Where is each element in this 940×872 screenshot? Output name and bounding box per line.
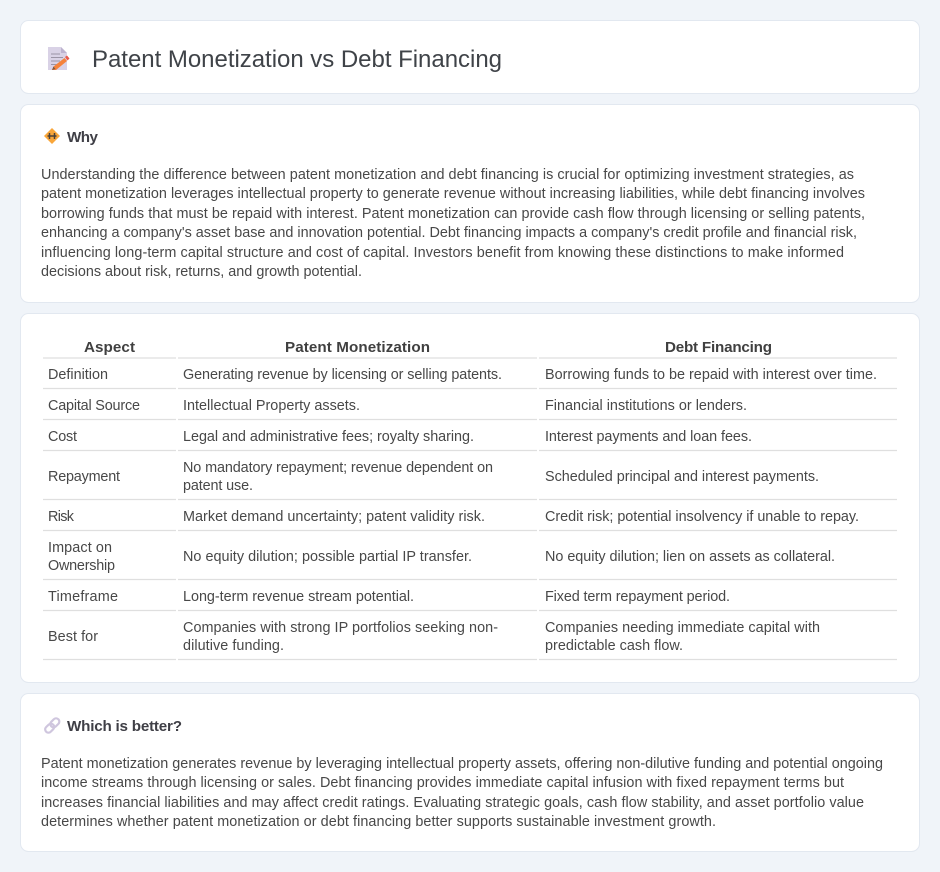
row: timeframe: Fixed term repayment period. (545, 589, 730, 605)
row: impact on ownership: No equity dilution; possible partial IP transfer. (183, 549, 472, 565)
row: cost: Interest payments and loan fees. (545, 429, 752, 445)
text block: why paragraph: influencing long-term capital structure and cost of capital. Investors benefit from knowing these distinctions to make informed (41, 245, 844, 261)
text block: why paragraph: patent monetization leverages intellectual property to generate revenue without increasing liabilities, while debt financing involves (41, 186, 865, 202)
row: risk: Market demand uncertainty; patent validity risk. (183, 509, 485, 525)
icon: memo with pencil (48, 47, 70, 70)
row: cost: Legal and administrative fees; royalty sharing. (183, 429, 474, 445)
icon: chain link (44, 717, 61, 734)
row: risk: Risk (48, 509, 75, 525)
row: best for (48, 620, 820, 654)
row: capital source: Financial institutions or lenders. (545, 398, 747, 414)
panel: why (20, 104, 920, 302)
row: impact on ownership: Impact on (48, 540, 112, 556)
text block: which is better paragraph: determines whether patent monetization or debt financing better supports sustainable investment growth. (41, 814, 716, 830)
icon: warning diamond (44, 128, 60, 144)
row: definition: Generating revenue by licensing or selling patents. (183, 367, 502, 383)
row: timeframe: Timeframe (48, 589, 118, 605)
panel: which is better (20, 694, 920, 852)
row: timeframe (48, 589, 730, 605)
text block: which is better paragraph: Patent monetization generates revenue by leveraging intellectual property assets, offering non-dilutive funding and potential ongoing (41, 756, 883, 772)
row: repayment (48, 460, 819, 494)
panel: header (20, 20, 920, 94)
heading: why: Why (67, 129, 99, 146)
row: capital source: Capital Source (48, 398, 140, 414)
row: risk: Credit risk; potential insolvency if unable to repay. (545, 509, 859, 525)
text block: why paragraph: enhancing a company's asset base and innovation potential. Debt financing impacts a company's credit profile and financial risk, (41, 225, 857, 241)
text block: why paragraph: borrowing funds that must be repaid with interest. Patent monetization can provide cash flow through licensing or selling patents, (41, 206, 865, 222)
row: capital source: Intellectual Property assets. (183, 398, 360, 414)
row: repayment: No mandatory repayment; revenue dependent on (183, 460, 493, 476)
table header row: Debt Financing (665, 339, 772, 356)
row: best for: predictable cash flow. (545, 638, 683, 654)
row: impact on ownership: No equity dilution; lien on assets as collateral. (545, 549, 835, 565)
text block: which is better paragraph: income streams through licensing or sales. Debt financing provides immediate capital infusion with fixed repayment terms but (41, 775, 844, 791)
text block: why paragraph: Understanding the difference between patent monetization and debt financing is crucial for optimizing investment strategies, as (41, 167, 854, 183)
table header row (84, 339, 772, 356)
text block: which is better paragraph (41, 756, 883, 830)
row: impact on ownership: Ownership (48, 558, 115, 574)
row: best for: Companies needing immediate capital with (545, 620, 820, 636)
heading: which is better: Which is better? (67, 718, 182, 735)
row: capital source (48, 398, 747, 414)
row: best for: Best for (48, 629, 98, 645)
row: repayment: patent use. (183, 478, 253, 494)
title: Patent Monetization vs Debt Financing (92, 46, 502, 73)
row: best for: dilutive funding. (183, 638, 284, 654)
table header row: Aspect (84, 339, 135, 356)
row: repayment: Repayment (48, 469, 120, 485)
row: repayment: Scheduled principal and interest payments. (545, 469, 819, 485)
row: impact on ownership (48, 540, 835, 574)
text block: why paragraph: decisions about risk, returns, and growth potential. (41, 264, 362, 280)
table header row: Patent Monetization (285, 339, 430, 356)
row: definition: Borrowing funds to be repaid with interest over time. (545, 367, 877, 383)
row: best for: Companies with strong IP portfolios seeking non- (183, 620, 498, 636)
row: definition (48, 367, 877, 383)
panel: comparison table (20, 314, 920, 682)
row: cost (48, 429, 752, 445)
text block: why paragraph (41, 167, 865, 280)
row: cost: Cost (48, 429, 77, 445)
row: timeframe: Long-term revenue stream potential. (183, 589, 414, 605)
row: risk (48, 509, 859, 525)
row: definition: Definition (48, 367, 108, 383)
text block: which is better paragraph: increases financial liabilities and may affect credit ratings. Evaluating strategic goals, cash flow stability, and asset portfolio value (41, 795, 864, 811)
